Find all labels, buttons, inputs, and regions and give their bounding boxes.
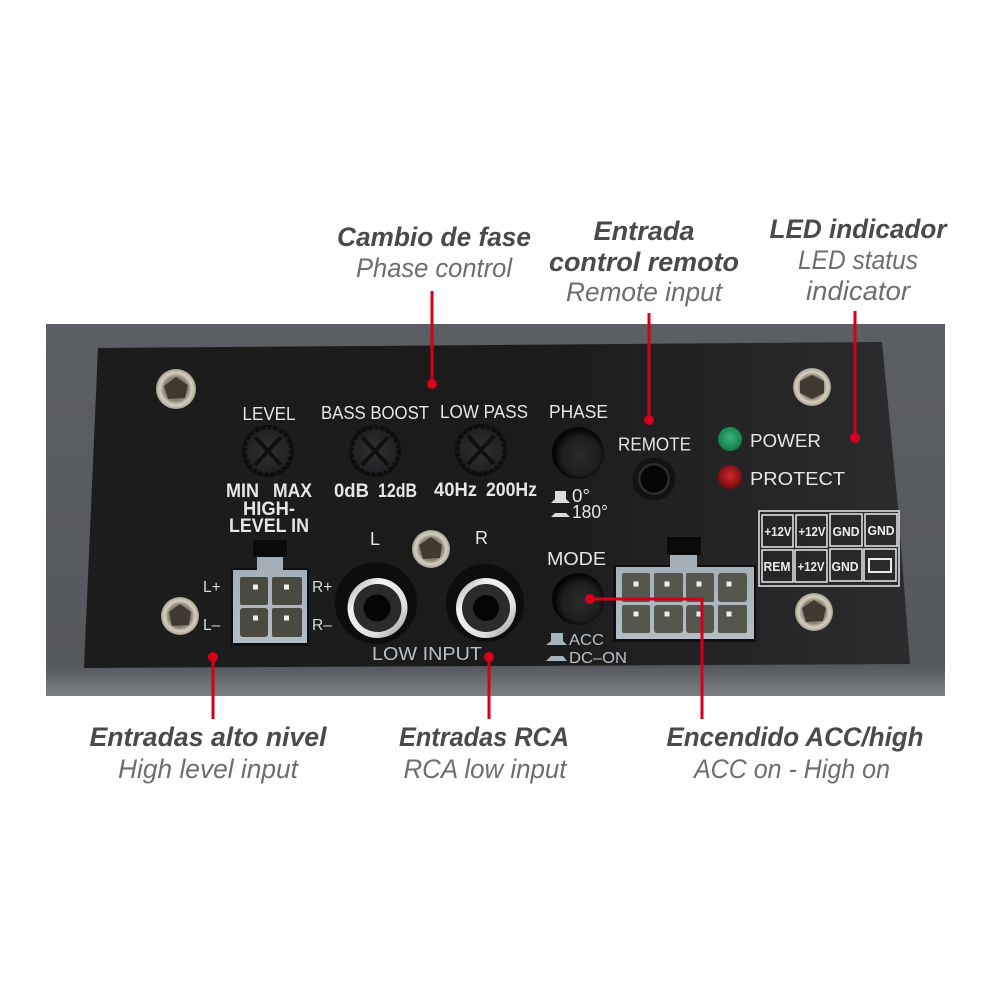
callout: phase control (337, 222, 531, 389)
power led (718, 427, 742, 451)
phase button (552, 427, 604, 479)
protect label: PROTECT (750, 469, 845, 489)
remote jack (632, 458, 676, 500)
panel labels: knob group: 40Hz (434, 480, 477, 501)
panel labels: knob group: 200Hz (486, 480, 537, 501)
callout: LED indicator (770, 214, 948, 443)
power pinout table: GND (868, 523, 894, 538)
low pass knob (455, 424, 507, 476)
level knob (242, 425, 294, 477)
callout: high level input: High level input (118, 754, 299, 784)
high level connector labels (203, 579, 332, 634)
mode labels: MODE (547, 549, 606, 569)
main 8-pin connector (613, 537, 756, 642)
callout: ACC/high power on: ACC on - High on (692, 754, 890, 784)
mode labels: DC–ON (569, 650, 627, 667)
panel labels: knob group: LEVEL (242, 404, 296, 424)
callout: LED indicator: LED status (798, 245, 918, 275)
power label: POWER (750, 431, 821, 451)
callout: phase control: Phase control (356, 253, 513, 283)
callout: LED indicator: indicator (806, 276, 911, 306)
callout: high level input (90, 652, 327, 784)
power pinout table: GND (832, 524, 860, 539)
panel labels: knob group: BASS BOOST (321, 403, 429, 423)
RCA jack left (335, 562, 417, 644)
screw: centre (412, 530, 450, 568)
protect led (718, 465, 742, 489)
callout: remote input: Entrada (594, 216, 694, 246)
panel labels: knob group: HIGH- (243, 499, 295, 520)
power pinout table: +12V (798, 559, 825, 574)
panel labels: knob group: LOW PASS (440, 402, 528, 422)
callout: high level input: Entradas alto nivel (90, 722, 327, 752)
screw: top left (156, 369, 196, 409)
callout: RCA input (399, 652, 569, 784)
amplifier body band (46, 324, 945, 696)
bass boost knob (349, 425, 401, 477)
power pinout table: +12V (764, 524, 792, 539)
high level connector (231, 540, 309, 646)
phase labels: 0° (572, 486, 590, 506)
power pinout table: REM (764, 559, 790, 574)
RCA jack right (446, 564, 524, 642)
panel labels: knob group: MIN (226, 481, 259, 502)
power pinout table: GND (832, 559, 858, 574)
phase labels: 180° (572, 502, 608, 522)
callout: RCA input: Entradas RCA (399, 722, 569, 752)
high level connector labels: L+ (203, 579, 221, 596)
panel labels: knob group: 12dB (378, 481, 417, 502)
power pinout table (759, 511, 899, 586)
panel labels: knob group: 0dB (334, 481, 369, 502)
callout: ACC/high power on: Encendido ACC/high (666, 722, 924, 752)
panel labels: knob group: MAX (273, 481, 312, 502)
callout: remote input (549, 216, 739, 425)
RCA label L: L (370, 529, 380, 549)
mode labels: ACC (569, 632, 604, 649)
RCA label R: R (475, 528, 488, 548)
callout: remote input: control remoto (549, 247, 739, 277)
high level connector labels: R– (312, 617, 332, 634)
panel labels: knob group (226, 402, 537, 537)
callout: remote input: Remote input (566, 277, 723, 307)
screw: top right (793, 368, 831, 406)
callout: phase control: Cambio de fase (337, 222, 531, 252)
mode labels (546, 549, 627, 667)
screw: bottom right (795, 593, 833, 631)
panel labels: knob group: LEVEL IN (229, 516, 309, 537)
black control plate (84, 342, 910, 668)
power pinout table: +12V (798, 524, 826, 539)
remote label: REMOTE (618, 434, 691, 454)
screw: bottom left (161, 597, 199, 635)
high level connector labels: L– (203, 617, 221, 634)
low input label: LOW INPUT (372, 644, 482, 664)
callout: LED indicator: LED indicador (770, 214, 948, 244)
high level connector labels: R+ (312, 579, 332, 596)
callout: ACC/high power on (585, 594, 924, 784)
phase labels (549, 402, 608, 522)
mode button (552, 573, 604, 625)
callout: RCA input: RCA low input (404, 754, 568, 784)
phase labels: PHASE (549, 402, 608, 422)
